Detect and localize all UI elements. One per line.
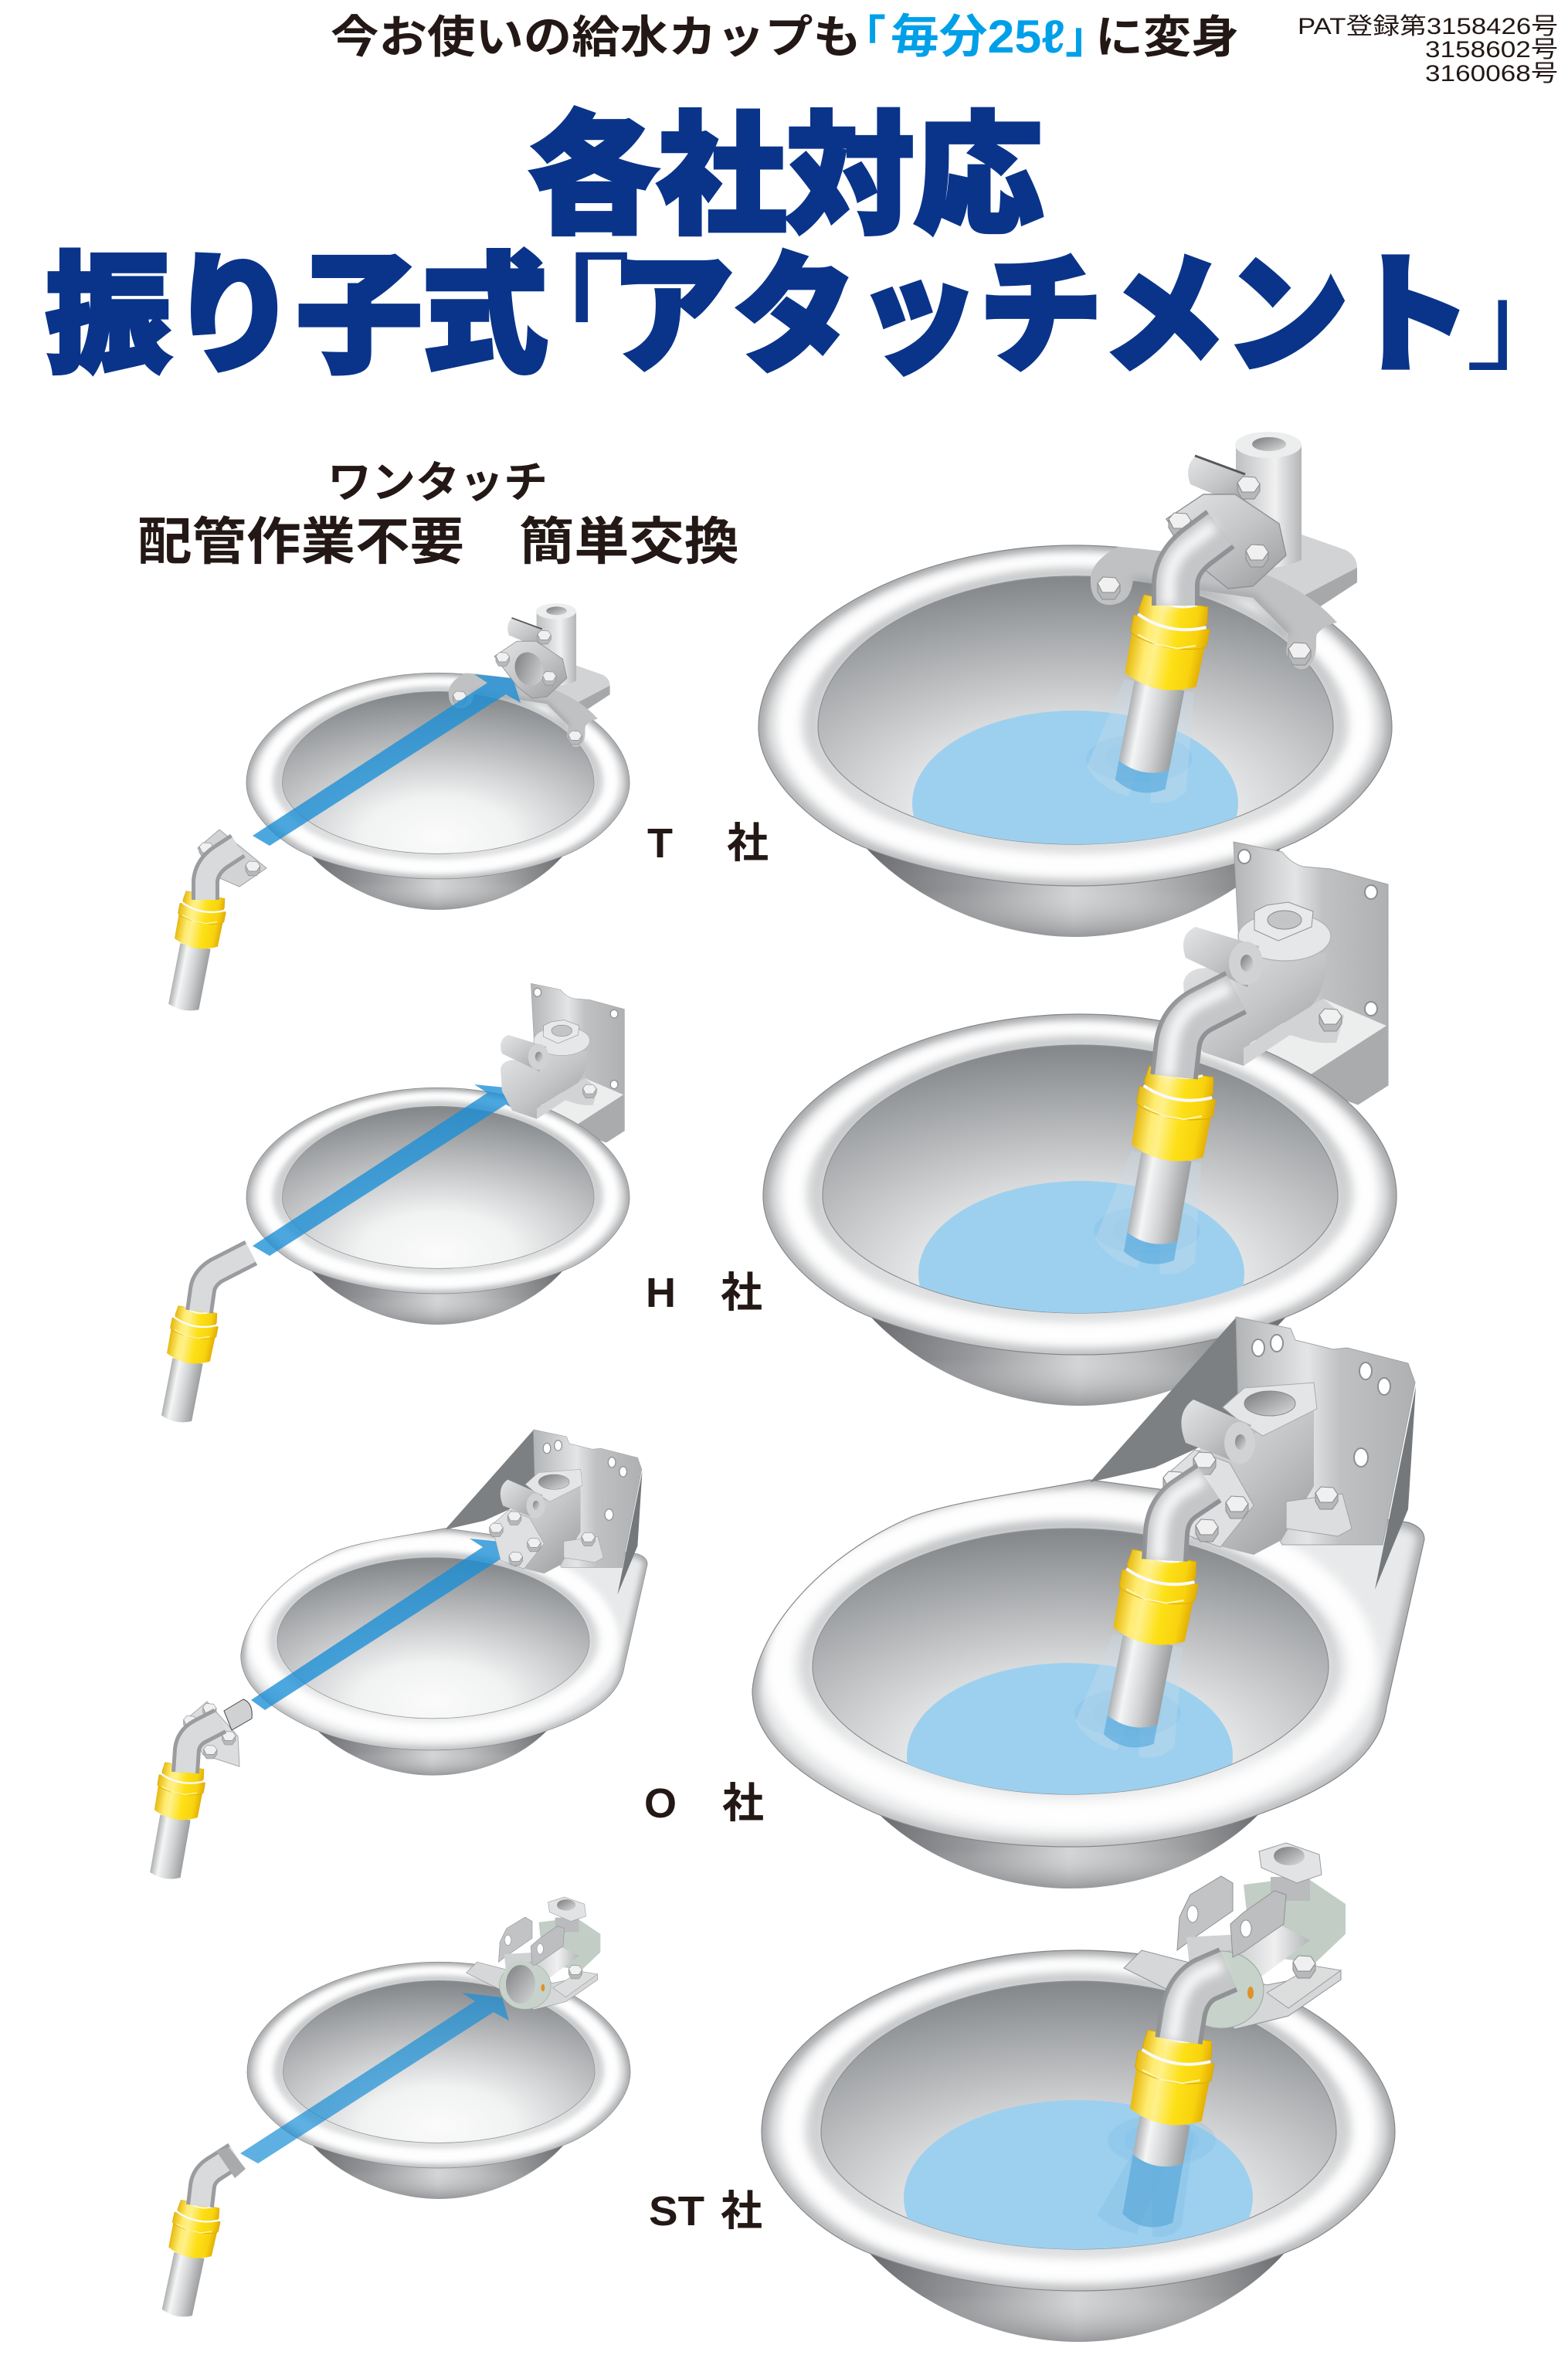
bowl [762, 1950, 1395, 2342]
label: O company: 社 [722, 1780, 764, 1827]
pipe [1091, 1062, 1227, 1279]
patent numbers: 3160068号 [1425, 61, 1558, 87]
heading: no piping work, easy replacement [137, 513, 739, 570]
label: H: H [646, 1270, 676, 1316]
mount [445, 1430, 642, 1594]
label: O: O [644, 1780, 677, 1827]
main title: 「 [470, 246, 633, 367]
water [907, 1663, 1233, 1794]
panel: large ST bowl assembly [762, 1843, 1395, 2342]
panel: large H bowl assembly [763, 842, 1397, 1406]
tabs [449, 673, 598, 747]
heading: no piping work, easy replacement: 配管作業不要 [137, 513, 464, 570]
detached pipe H [153, 1253, 251, 1426]
label: ST: ST [649, 2188, 704, 2235]
arrow [253, 1084, 521, 1256]
label: ST company: 社 [721, 2188, 762, 2235]
bowl [246, 673, 630, 910]
panel: large T bowl assembly [759, 432, 1392, 937]
mount [1090, 1317, 1416, 1590]
patent numbers: 3158602号 [1425, 37, 1558, 63]
subtitle end: に変身 [1095, 12, 1239, 63]
arrow [251, 1539, 516, 1710]
label: T company: 社 [727, 820, 769, 867]
detached pipe ST [154, 2147, 246, 2321]
mount [1091, 456, 1337, 669]
elbow [1169, 525, 1220, 606]
heading: no piping work, easy replacement: 簡単交換 [519, 513, 739, 570]
bowl [246, 1088, 630, 1325]
patent numbers [1298, 14, 1558, 87]
subtitle: 今お使いの給水カップも [331, 12, 861, 63]
mount [494, 618, 567, 698]
water [918, 1181, 1244, 1313]
main title: 各社対応 [529, 103, 1043, 250]
pipe [1095, 2027, 1218, 2241]
label: H company: 社 [721, 1270, 762, 1316]
panel: large O bowl assembly [752, 1317, 1424, 1888]
bowl [759, 545, 1392, 937]
main title: アタッチメント [610, 243, 1471, 389]
water [904, 2100, 1253, 2249]
arrow [240, 1993, 509, 2163]
subtitle bracket close: 」 [1065, 12, 1110, 63]
flange opening [511, 648, 548, 690]
bowl [763, 1014, 1397, 1406]
panel: small T bowl assembly [246, 603, 630, 910]
subtitle bracket open: 「 [841, 12, 886, 63]
mount [1183, 902, 1344, 1066]
bowl [241, 1529, 647, 1776]
panel: small H bowl assembly [246, 983, 630, 1325]
pipe [1083, 590, 1221, 809]
patent numbers: PAT登録第3158426号 [1298, 14, 1558, 39]
elbow [1168, 987, 1236, 1077]
pipe [1071, 1545, 1210, 1763]
elbow [1159, 1478, 1209, 1560]
panel: small ST bowl assembly [240, 1897, 630, 2199]
detached pipe T [160, 830, 266, 1014]
arrow [253, 674, 521, 846]
elbow [1173, 1965, 1228, 2041]
main title: 振り子式 [46, 243, 548, 389]
mount [501, 1020, 598, 1119]
bowl [247, 1962, 630, 2199]
panel: small O bowl assembly [241, 1430, 647, 1776]
bowl [752, 1480, 1424, 1888]
heading: one-touch: ワンタッチ [328, 458, 548, 507]
main title [46, 103, 1568, 389]
subtitle highlight: 毎分25ℓ [891, 11, 1065, 63]
mount [467, 1897, 600, 2010]
mount [1124, 1843, 1346, 2029]
bore [504, 1963, 538, 2006]
detached pipe O [141, 1699, 252, 1882]
label: T: T [647, 820, 673, 867]
water [912, 711, 1238, 844]
